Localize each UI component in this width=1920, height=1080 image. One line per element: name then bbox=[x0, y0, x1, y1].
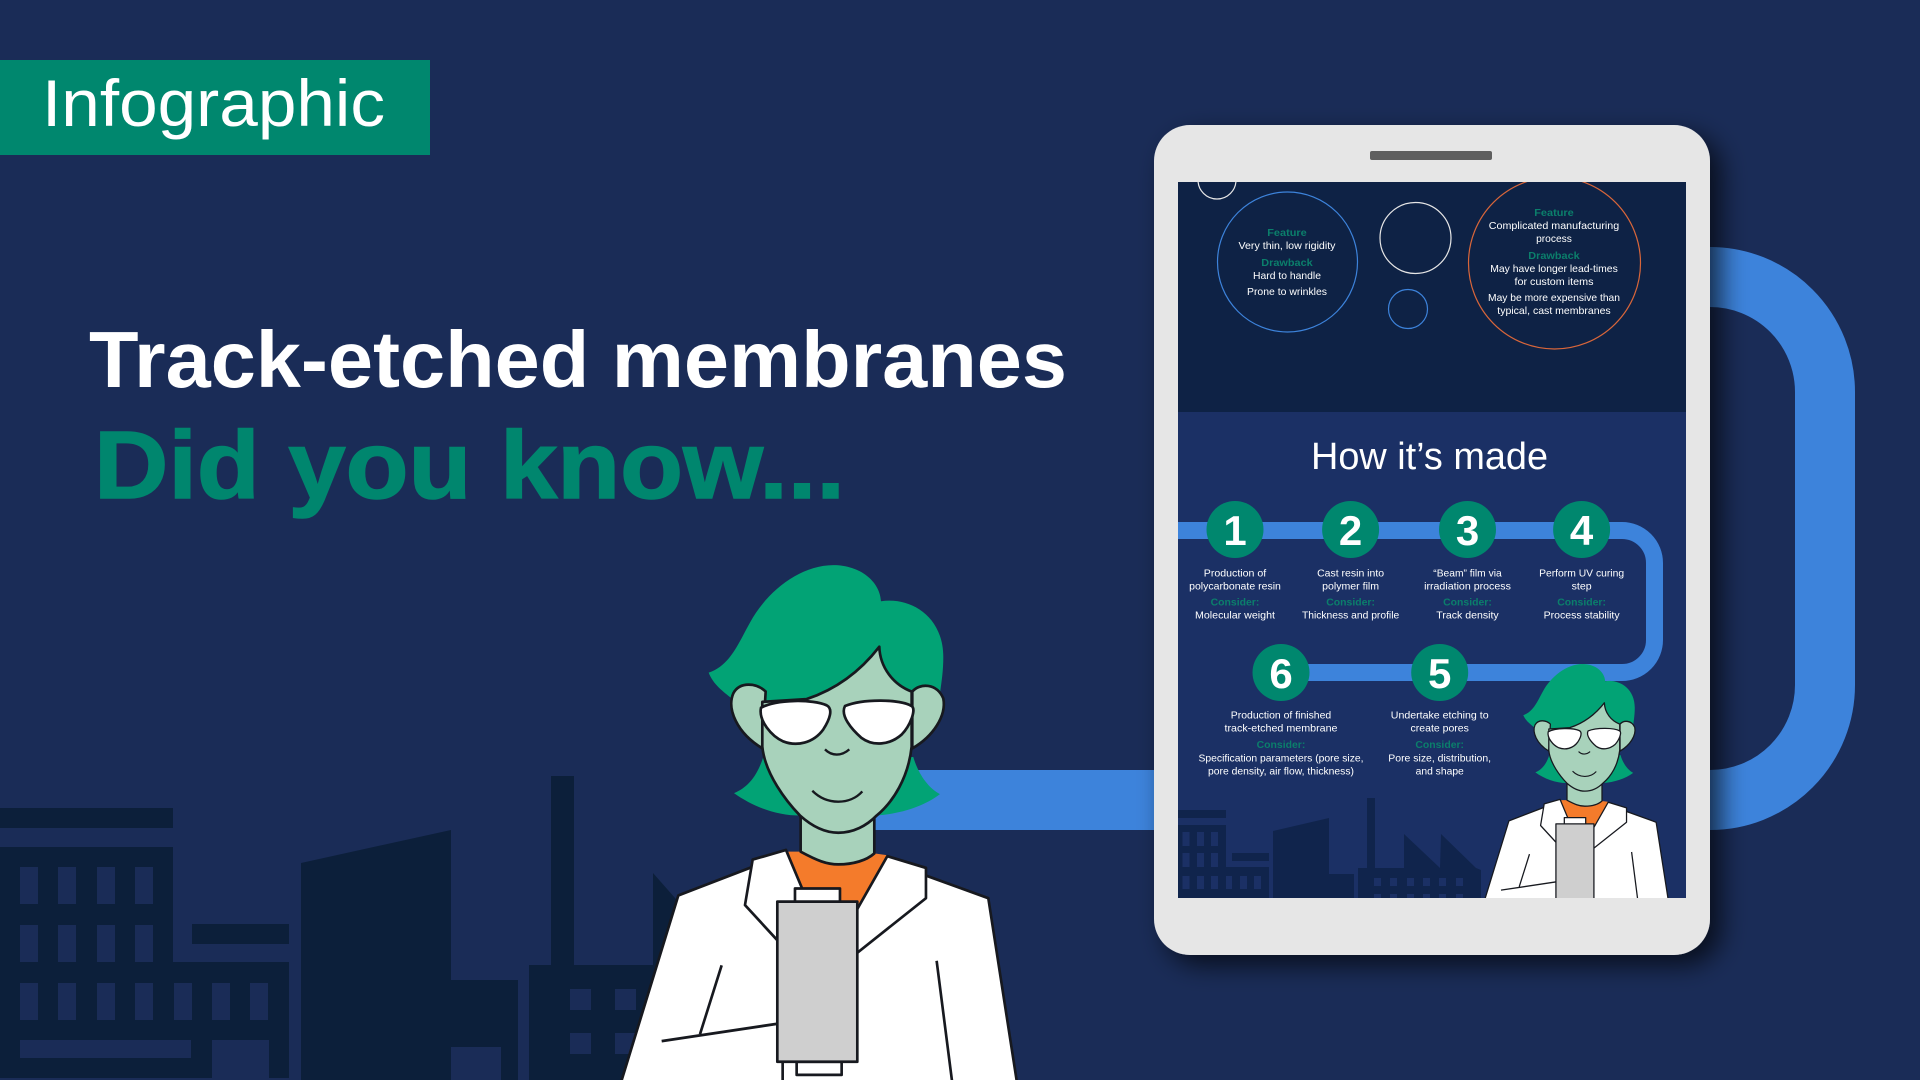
step 4: Consider: bbox=[1557, 596, 1606, 608]
bubble: thin membrane feature bbox=[1218, 192, 1358, 332]
step 2 bbox=[1302, 501, 1399, 622]
step 4: Perform UV curing bbox=[1539, 568, 1624, 580]
step 3: “Beam” film via bbox=[1433, 568, 1502, 580]
banner: Infographic: Infographic bbox=[42, 66, 385, 140]
step 6: track-etched membrane bbox=[1224, 722, 1338, 734]
step 5: Undertake etching to bbox=[1391, 710, 1489, 722]
bubble: manufacturing feature: process bbox=[1536, 233, 1572, 245]
step 4: Process stability bbox=[1544, 610, 1620, 622]
banner: Infographic bbox=[0, 60, 430, 155]
bubble: manufacturing feature: May have longer lead-times bbox=[1490, 263, 1618, 275]
bubble: manufacturing feature: typical, cast membranes bbox=[1497, 305, 1611, 317]
step 3: irradiation process bbox=[1424, 580, 1511, 592]
bubble: manufacturing feature: Feature bbox=[1534, 207, 1574, 219]
step 6 bbox=[1198, 644, 1364, 778]
process pipe bbox=[1178, 530, 1654, 672]
title: Track-etched membranes bbox=[89, 315, 1067, 404]
decorative circles bbox=[1198, 182, 1452, 330]
step 1 bbox=[1189, 501, 1281, 622]
mini scientist character bbox=[1480, 664, 1670, 914]
subtitle: Did you know... bbox=[94, 412, 845, 519]
step 6: Consider: bbox=[1257, 739, 1305, 751]
bubble: thin membrane feature: Drawback bbox=[1261, 257, 1313, 269]
step 5: and shape bbox=[1416, 766, 1464, 778]
scientist character bbox=[618, 565, 1018, 1080]
bubble: thin membrane feature: Feature bbox=[1267, 227, 1307, 239]
screen top section bbox=[1178, 182, 1686, 412]
step 4: step bbox=[1572, 580, 1592, 592]
step 2: 2 bbox=[1339, 507, 1362, 554]
step 5: Pore size, distribution, bbox=[1388, 752, 1491, 764]
step 6: Specification parameters (pore size, bbox=[1198, 752, 1364, 764]
bubble: thin membrane feature: Prone to wrinkles bbox=[1247, 286, 1327, 298]
step 1: Consider: bbox=[1211, 596, 1259, 608]
bubble: manufacturing feature: Drawback bbox=[1528, 250, 1580, 262]
tablet body bbox=[1154, 125, 1710, 955]
bubble: thin membrane feature: Very thin, low rigidity bbox=[1238, 240, 1336, 252]
step 3 bbox=[1424, 501, 1511, 622]
step 3: Consider: bbox=[1443, 596, 1492, 608]
step 5 bbox=[1388, 644, 1491, 778]
step 4: 4 bbox=[1570, 507, 1594, 554]
heading: How it's made: How it’s made bbox=[1311, 436, 1548, 478]
step 2: polymer film bbox=[1322, 580, 1379, 592]
step 3: Track density bbox=[1436, 610, 1499, 622]
screen lower section bbox=[1178, 412, 1686, 898]
step 6: Production of finished bbox=[1231, 710, 1331, 722]
step 2: Thickness and profile bbox=[1302, 610, 1399, 622]
bubble: thin membrane feature: Hard to handle bbox=[1253, 270, 1321, 282]
bubble: manufacturing feature: May be more expensive than bbox=[1488, 292, 1620, 304]
factory skyline bbox=[0, 776, 709, 1080]
step 5: Consider: bbox=[1415, 739, 1464, 751]
step 1: polycarbonate resin bbox=[1189, 580, 1281, 592]
step 6: 6 bbox=[1269, 650, 1293, 697]
step 1: 1 bbox=[1223, 507, 1247, 554]
step 1: Molecular weight bbox=[1195, 610, 1275, 622]
step 2: Consider: bbox=[1326, 596, 1375, 608]
step 2: Cast resin into bbox=[1317, 568, 1384, 580]
bubble: manufacturing feature bbox=[1468, 177, 1640, 349]
step 3: 3 bbox=[1456, 507, 1479, 554]
mini skyline bbox=[1178, 798, 1481, 898]
bubble: manufacturing feature: for custom items bbox=[1514, 276, 1594, 288]
step 4 bbox=[1539, 501, 1624, 622]
bubble: manufacturing feature: Complicated manufacturing bbox=[1489, 220, 1619, 232]
tablet screen bbox=[1178, 161, 1686, 914]
step 5: create pores bbox=[1411, 722, 1469, 734]
step 5: 5 bbox=[1428, 650, 1451, 697]
step 6: pore density, air flow, thickness) bbox=[1208, 766, 1354, 778]
step 1: Production of bbox=[1204, 568, 1266, 580]
blue pipe bbox=[860, 277, 1825, 800]
tablet speaker bbox=[1370, 151, 1492, 160]
